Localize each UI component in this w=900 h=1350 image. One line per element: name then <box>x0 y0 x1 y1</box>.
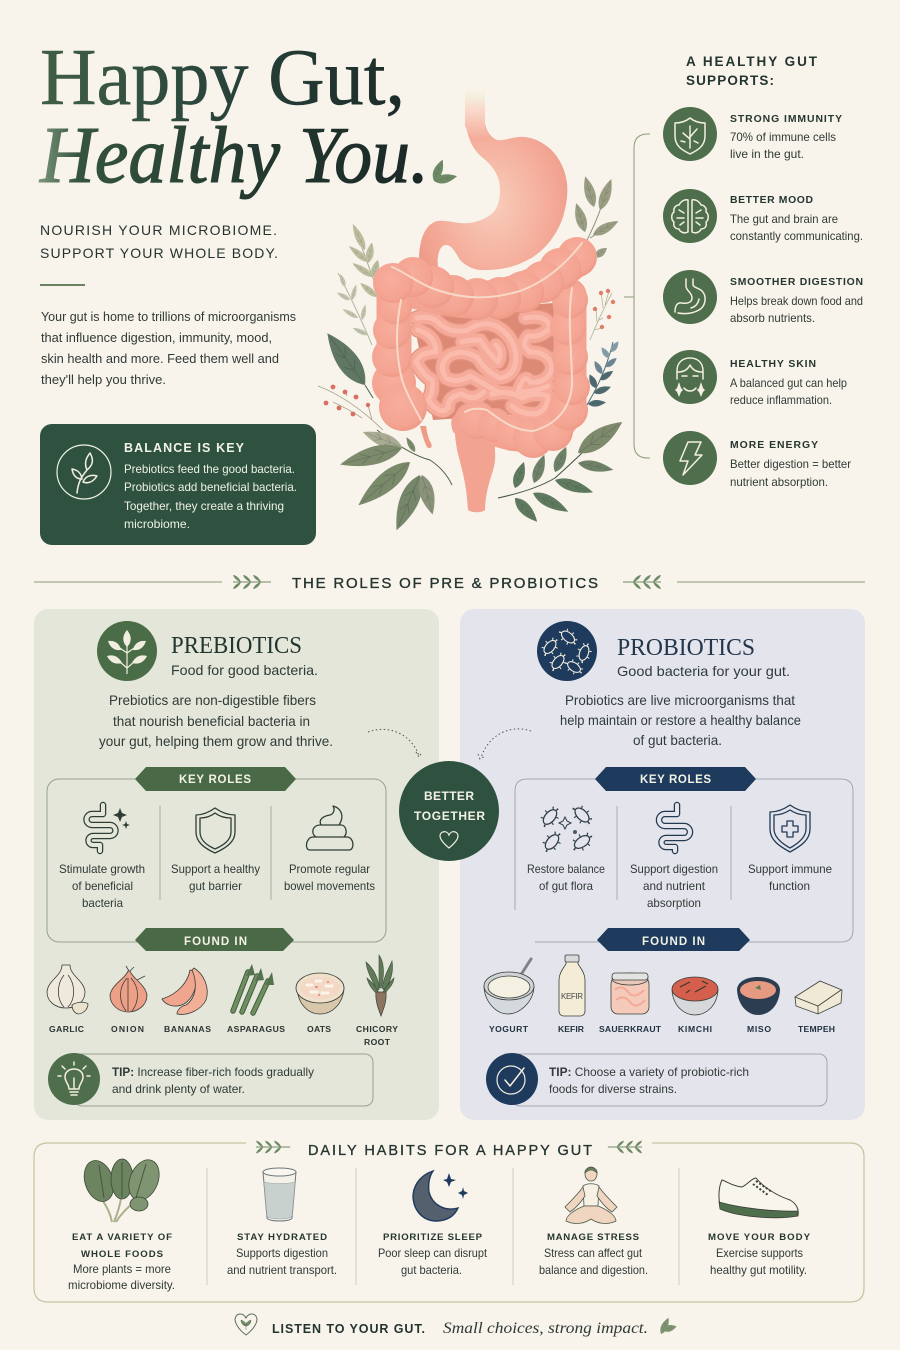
footer: LISTEN TO YOUR GUT. <box>272 1322 425 1336</box>
subtitle: SUPPORT YOUR WHOLE BODY. <box>40 245 278 261</box>
role: support digestion: Support digestion <box>630 862 718 876</box>
banner: found in <box>135 928 294 951</box>
food: asparagus <box>227 964 285 1034</box>
botanicals: bottom left leaves <box>338 426 452 534</box>
icon: intestine with sparkles <box>87 805 130 851</box>
intro paragraph: that influence digestion, immunity, mood, <box>41 330 272 345</box>
appendix <box>420 426 432 448</box>
role: support digestion <box>630 805 718 910</box>
role: stimulate growth <box>59 805 145 910</box>
title <box>39 34 429 200</box>
subtitle: NOURISH YOUR MICROBIOME. <box>40 222 277 238</box>
tip: fiber: and drink plenty of water. <box>112 1082 245 1096</box>
habit: stress: balance and digestion. <box>539 1263 648 1277</box>
panel: daily habits <box>34 1141 864 1302</box>
benefit: healthy skin: HEALTHY SKIN <box>730 359 816 370</box>
organ: small intestine <box>412 303 556 420</box>
benefit: healthy skin: reduce inflammation. <box>730 393 832 407</box>
role: immune: function <box>769 879 810 893</box>
panel: prebiotics: Food for good bacteria. <box>171 662 318 678</box>
food: chicory root: CHICORY <box>356 1024 398 1034</box>
banner: key roles <box>595 767 756 791</box>
panel: balance is key: Probiotics add beneficial bacteria. <box>124 480 297 494</box>
banner: found in <box>597 928 750 951</box>
food: yogurt <box>484 959 534 1034</box>
benefit: better mood: constantly communicating. <box>730 229 863 243</box>
role: restore balance: Restore balance <box>527 862 605 876</box>
role: restore balance <box>527 805 605 893</box>
intro paragraph <box>41 309 296 387</box>
panel: balance is key: Prebiotics feed the good bacteria. <box>124 462 295 476</box>
panel: prebiotics <box>34 609 439 1120</box>
benefit: more energy: Better digestion = better <box>730 457 851 471</box>
benefit: healthy skin <box>663 350 847 407</box>
botanicals: olive sprig <box>347 222 382 300</box>
habit: whole foods: WHOLE FOODS <box>81 1249 164 1260</box>
panel: prebiotics: PREBIOTICS <box>171 633 302 659</box>
subtitle <box>40 222 278 261</box>
food: oats <box>296 973 344 1034</box>
habit: hydrated: and nutrient transport. <box>227 1263 337 1277</box>
icon: bacteria <box>541 805 592 852</box>
benefit: strong immunity: live in the gut. <box>730 147 804 161</box>
prebiotics description: that nourish beneficial bacteria in <box>113 713 310 729</box>
botanicals: coral berries left <box>318 385 383 430</box>
role: stimulate growth: bacteria <box>82 896 123 910</box>
food: miso <box>737 977 780 1034</box>
habit: whole foods: More plants = more <box>73 1262 171 1276</box>
section heading: roles of pre and probiotics <box>34 575 865 592</box>
role: immune <box>748 805 832 893</box>
habit: move: Exercise supports <box>716 1246 803 1260</box>
food: kimchi: KIMCHI <box>678 1024 712 1034</box>
icon: shield <box>663 107 717 161</box>
food: chicory root <box>356 955 398 1047</box>
benefit: smoother digestion: absorb nutrients. <box>730 311 815 325</box>
benefit: healthy skin: A balanced gut can help <box>730 376 847 390</box>
rectum <box>451 403 506 512</box>
banner: key roles: KEY ROLES <box>179 774 251 786</box>
food: kimchi <box>672 977 718 1034</box>
heading: daily habits: DAILY HABITS FOR A HAPPY GUT <box>308 1143 592 1159</box>
food: kefir <box>558 955 585 1034</box>
colon haustra <box>372 237 597 458</box>
banner: key roles: KEY ROLES <box>640 774 711 786</box>
habit: whole foods <box>68 1155 175 1292</box>
icon: glass of water <box>263 1168 296 1221</box>
heading: daily habits <box>256 1141 642 1159</box>
benefit: smoother digestion: Helps break down food and <box>730 294 863 308</box>
title: Happy Gut, <box>40 34 405 122</box>
colon stripes <box>392 243 582 431</box>
prebiotics description: Prebiotics are non-digestible fibers <box>109 692 316 708</box>
probiotics description: Probiotics are live microorganisms that <box>565 692 795 708</box>
key roles box <box>515 779 853 942</box>
prebiotics description: your gut, helping them grow and thrive. <box>99 733 333 749</box>
food: onion: ONION <box>111 1024 144 1034</box>
food: tempeh: TEMPEH <box>798 1024 835 1034</box>
role: bowel movements: bowel movements <box>284 879 375 893</box>
role: support digestion: and nutrient <box>643 879 706 893</box>
badge: better together <box>399 761 499 861</box>
habit: hydrated <box>227 1168 337 1277</box>
role: support digestion: absorption <box>647 896 701 910</box>
food: bananas: BANANAS <box>164 1024 211 1034</box>
food: yogurt: YOGURT <box>489 1024 529 1034</box>
benefit: more energy <box>663 431 851 489</box>
role: immune: Support immune <box>748 862 832 876</box>
panel: balance is key: BALANCE IS KEY <box>124 441 245 455</box>
botanicals: coral berries right <box>590 289 615 340</box>
heading: a healthy gut supports <box>686 54 818 88</box>
role: bowel movements <box>284 806 375 893</box>
connector: bracket <box>624 134 650 458</box>
tip: variety: TIP: Choose a variety of probiotic-rich <box>549 1065 749 1079</box>
footer <box>235 1314 677 1337</box>
role: stimulate growth: of beneficial <box>72 879 133 893</box>
icon: intestine <box>659 805 690 851</box>
icon: check mark <box>486 1053 538 1105</box>
colon base bands <box>393 257 577 436</box>
icon: stomach <box>663 270 717 324</box>
role: gut barrier: Support a healthy <box>171 862 260 876</box>
probiotics description: of gut bacteria. <box>633 732 722 748</box>
tip: variety: foods for diverse strains. <box>549 1082 677 1096</box>
role: stimulate growth: Stimulate growth <box>59 862 145 876</box>
botanicals: dark leaf <box>319 327 373 398</box>
icon: prebiotics plant <box>97 621 157 681</box>
habit: whole foods: microbiome diversity. <box>68 1278 175 1292</box>
food: sauerkraut <box>599 973 662 1034</box>
title: Healthy You. <box>39 112 429 200</box>
arrow: prebiotics to badge <box>368 729 422 757</box>
icon: shield with cross <box>770 805 810 852</box>
food: kefir: KEFIR <box>561 992 583 1001</box>
habit: sleep <box>378 1171 488 1277</box>
badge: better together: BETTER <box>424 789 474 803</box>
icon: stool <box>306 806 353 850</box>
benefit: smoother digestion <box>663 270 863 325</box>
botanicals: bottom right leaves <box>498 415 627 526</box>
panel: probiotics: PROBIOTICS <box>617 635 755 661</box>
habit: hydrated: STAY HYDRATED <box>237 1232 327 1243</box>
prebiotics description <box>99 692 333 749</box>
food: sauerkraut: SAUERKRAUT <box>599 1024 662 1034</box>
habit: sleep: Poor sleep can disrupt <box>378 1246 488 1260</box>
food: asparagus: ASPARAGUS <box>227 1024 285 1034</box>
icon: lightning bolt <box>663 431 717 485</box>
icon: leaf sprig <box>658 1316 677 1335</box>
icon: shield <box>196 808 235 853</box>
food: garlic <box>47 965 88 1034</box>
icon: face <box>663 350 717 404</box>
icon: running shoe <box>719 1178 798 1218</box>
food: kefir: KEFIR <box>558 1024 585 1034</box>
heading: a healthy gut supports: SUPPORTS: <box>686 73 774 88</box>
habit: hydrated: Supports digestion <box>236 1246 328 1260</box>
role: gut barrier: gut barrier <box>189 879 242 893</box>
habit: stress: MANAGE STRESS <box>547 1232 640 1243</box>
benefit: better mood: The gut and brain are <box>730 212 838 226</box>
intro paragraph: Your gut is home to trillions of microorganisms <box>41 309 296 324</box>
intro paragraph: they'll help you thrive. <box>41 372 166 387</box>
panel: balance is key <box>40 424 316 545</box>
benefit: more energy: MORE ENERGY <box>730 440 818 451</box>
food: onion <box>110 966 147 1034</box>
icon: crescent moon <box>413 1171 468 1221</box>
icon: spinach <box>79 1155 165 1222</box>
botanicals: top right sprig <box>571 175 621 260</box>
benefit: smoother digestion: SMOOTHER DIGESTION <box>730 277 863 288</box>
icon: title leaves <box>430 158 458 185</box>
organ: large intestine <box>372 237 597 512</box>
icon: heart with sprout <box>235 1314 257 1335</box>
habit: sleep: PRIORITIZE SLEEP <box>383 1232 483 1243</box>
section heading: roles of pre and probiotics: THE ROLES OF PRE & PROBIOTICS <box>292 575 598 592</box>
banner: key roles <box>135 767 296 791</box>
food: bananas <box>162 968 211 1034</box>
illustration: digestive system with botanicals <box>318 88 627 534</box>
probiotics description: help maintain or restore a healthy balance <box>560 712 801 728</box>
benefit: better mood <box>663 189 863 243</box>
tip: fiber <box>48 1053 373 1106</box>
icon: brain <box>663 189 717 243</box>
benefit: better mood: BETTER MOOD <box>730 195 813 206</box>
panel: balance is key: microbiome. <box>124 517 190 531</box>
tip: variety <box>486 1053 827 1106</box>
badge: better together: TOGETHER <box>414 809 485 823</box>
food: miso: MISO <box>747 1024 771 1034</box>
banner: found in: FOUND IN <box>642 936 705 948</box>
key roles box <box>47 779 386 942</box>
habit: stress <box>539 1167 648 1277</box>
intro paragraph: skin health and more. Feed them well and <box>41 351 279 366</box>
benefit: more energy: nutrient absorption. <box>730 475 828 489</box>
probiotics description <box>560 692 801 748</box>
banner: found in: FOUND IN <box>184 936 247 948</box>
benefit: strong immunity: 70% of immune cells <box>730 130 836 144</box>
panel: probiotics: Good bacteria for your gut. <box>617 663 790 679</box>
habit: move <box>708 1178 811 1277</box>
icon: probiotics bacteria <box>537 621 597 681</box>
tip: fiber: TIP: Increase fiber-rich foods gradually <box>112 1065 314 1079</box>
heading: a healthy gut supports: A HEALTHY GUT <box>686 54 818 69</box>
habit: whole foods: EAT A VARIETY OF <box>72 1232 172 1243</box>
habit: stress: Stress can affect gut <box>544 1246 643 1260</box>
food: garlic: GARLIC <box>49 1024 84 1034</box>
habit: move: MOVE YOUR BODY <box>708 1232 811 1243</box>
habit: move: healthy gut motility. <box>710 1263 807 1277</box>
icon: light bulb <box>48 1053 100 1105</box>
food: chicory root: ROOT <box>364 1037 391 1047</box>
botanicals: blue sprig <box>587 340 621 407</box>
food: tempeh <box>795 981 842 1034</box>
arrow: probiotics to badge <box>478 729 531 759</box>
botanicals: pale sprig <box>336 273 372 345</box>
footer: Small choices, strong impact. <box>443 1320 648 1337</box>
role: restore balance: of gut flora <box>539 879 593 893</box>
icon: sprout <box>57 445 111 499</box>
benefit: strong immunity <box>663 107 842 161</box>
panel: balance is key: Together, they create a thriving <box>124 499 284 513</box>
organ: esophagus and stomach <box>419 88 567 275</box>
panel: probiotics <box>460 609 865 1120</box>
food: oats: OATS <box>307 1024 331 1034</box>
icon: meditating person <box>565 1167 617 1223</box>
benefit: strong immunity: STRONG IMMUNITY <box>730 114 842 125</box>
role: bowel movements: Promote regular <box>289 862 370 876</box>
habit: sleep: gut bacteria. <box>401 1263 462 1277</box>
role: gut barrier <box>171 808 260 893</box>
